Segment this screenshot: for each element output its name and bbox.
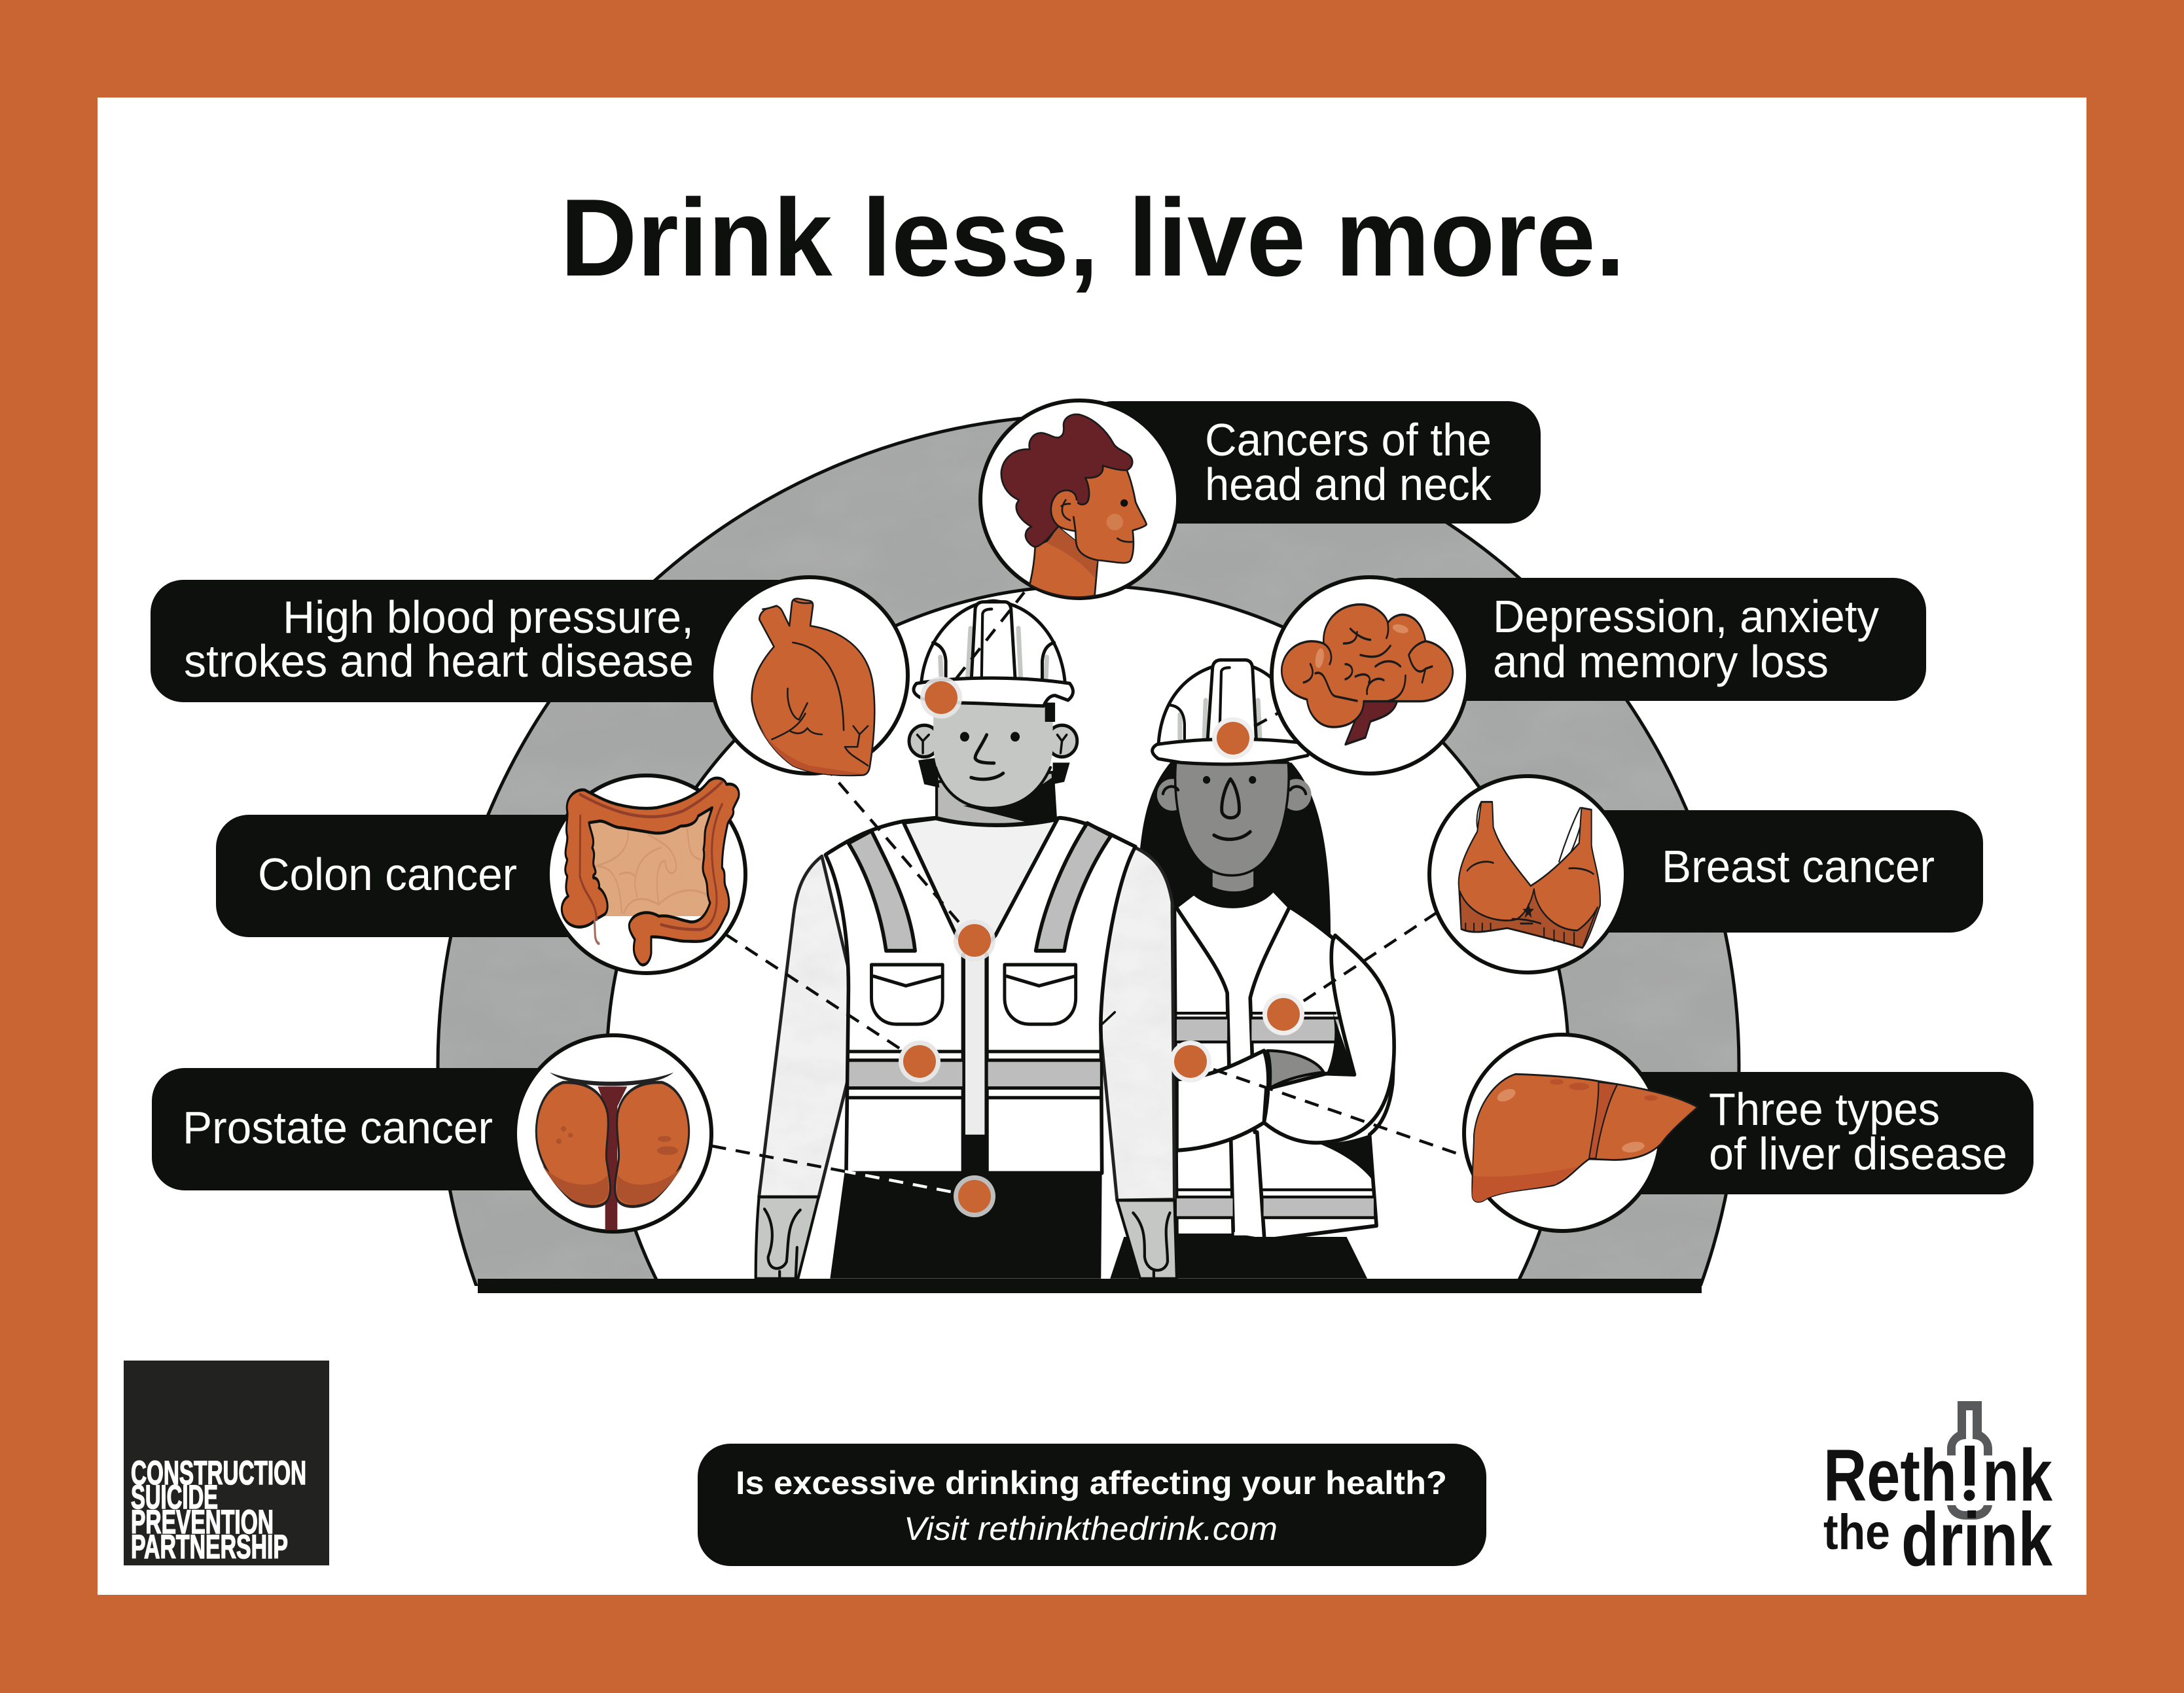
label: heart: [151, 580, 810, 702]
ground line: [478, 1279, 1702, 1293]
label: depression: [1369, 578, 1926, 701]
marker dots: [899, 677, 1304, 1217]
logo: Rethink the drink: drink: [1901, 1497, 2052, 1582]
icon: liver: [1472, 1074, 1698, 1202]
circle: brain: [1272, 577, 1468, 774]
logo: Construction Suicide Prevention Partnership: PARTNERSHIP: [131, 1528, 288, 1565]
label: liver: of liver disease: [1709, 1128, 2007, 1179]
right sleeve: [1101, 847, 1174, 1200]
label: colon: Colon cancer: [258, 849, 517, 900]
logo: Rethink the drink: [1823, 1401, 2053, 1582]
label: head and neck: [1080, 401, 1541, 524]
icon: head: [1001, 414, 1147, 597]
label: breast: [1528, 810, 1983, 933]
circle: colon: [548, 775, 745, 973]
vest and shirt: [825, 818, 1136, 1173]
hard hat: [921, 601, 1065, 686]
hard hat: [1158, 663, 1299, 746]
trousers: [830, 1171, 1102, 1279]
call to action: [698, 1444, 1486, 1566]
logo: Construction Suicide Prevention Partnership: SUICIDE: [131, 1478, 218, 1516]
circle: head: [980, 401, 1178, 598]
title: Drink less, live more.: [560, 176, 1625, 299]
female worker: [1110, 660, 1394, 1279]
icon: prostate: [536, 1073, 689, 1230]
logo: Rethink the drink: Reth: [1823, 1435, 1957, 1516]
label: liver: [1562, 1072, 2033, 1194]
left sleeve: [759, 856, 853, 1197]
dashed connector lines: [711, 592, 1465, 1196]
label: colon: [216, 815, 648, 937]
circle: breast: [1429, 776, 1626, 972]
call to action: Visit rethinkthedrink.com: [904, 1510, 1278, 1547]
call to action: Is excessive drinking affecting your health?: [736, 1465, 1447, 1501]
logo: Rethink the drink: nk: [1982, 1435, 2053, 1516]
label: heart: High blood pressure,: [283, 592, 694, 643]
label: liver: Three types: [1709, 1084, 1940, 1135]
pockets: [871, 965, 942, 1024]
vest stripes: [1177, 1018, 1227, 1042]
male worker: [756, 601, 1177, 1279]
zip: [963, 955, 987, 1135]
label: head and neck: Cancers of the: [1205, 414, 1492, 465]
label: prostate: Prostate cancer: [183, 1102, 493, 1153]
icon: bra: [1459, 802, 1600, 948]
logo: Construction Suicide Prevention Partnership: PREVENTION: [131, 1503, 274, 1541]
circle: prostate: [515, 1035, 711, 1232]
icon: brain: [1281, 605, 1453, 745]
icon: heart: [752, 599, 874, 775]
icon: colon: [562, 778, 739, 965]
logo: Construction Suicide Prevention Partnership: [124, 1361, 329, 1565]
label: head and neck: head and neck: [1205, 459, 1492, 510]
label: depression: Depression, anxiety: [1493, 591, 1879, 642]
reflective bands: [850, 1061, 962, 1087]
circle: liver: [1464, 1035, 1660, 1231]
label: heart: strokes and heart disease: [184, 635, 694, 686]
grey arch: [436, 416, 1741, 1286]
logo: Rethink the drink: the: [1823, 1505, 1890, 1560]
gloves: [756, 1197, 819, 1279]
logo: Construction Suicide Prevention Partnership: CONSTRUCTION: [131, 1454, 306, 1491]
label: breast: Breast cancer: [1662, 841, 1935, 892]
label: depression: and memory loss: [1493, 636, 1829, 687]
label: prostate: [152, 1068, 613, 1190]
circle: heart: [711, 577, 908, 774]
